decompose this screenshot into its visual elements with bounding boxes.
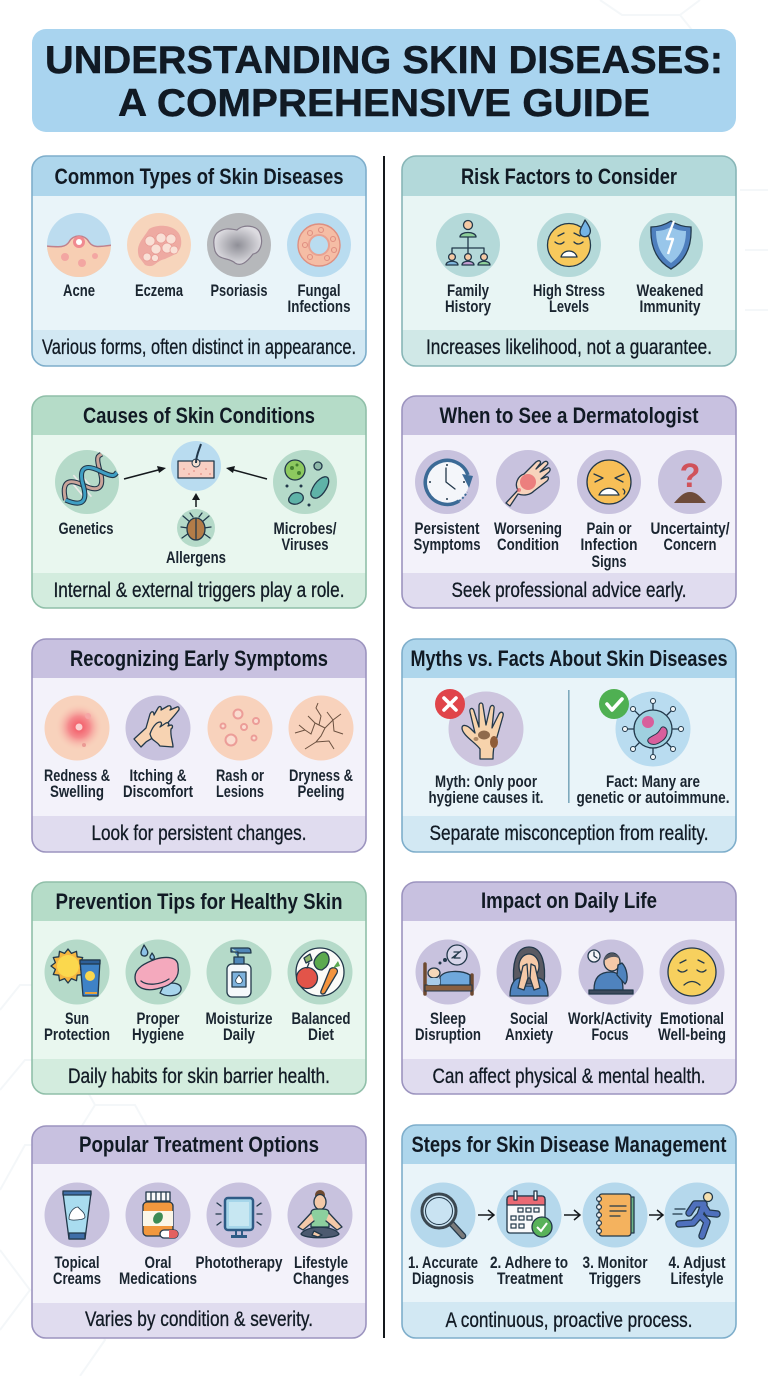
- panel: myths vs. facts: [402, 639, 736, 852]
- icon: oral medications: [126, 1182, 190, 1248]
- icon: topical creams tube: [44, 1182, 110, 1248]
- labels: genetic or autoimmune.: [576, 789, 730, 807]
- heading: Causes of Skin Conditions: [83, 403, 315, 428]
- labels: Rash or: [216, 767, 264, 785]
- labels: Persistent: [414, 520, 480, 538]
- labels: Topical: [54, 1254, 100, 1272]
- labels: Levels: [549, 298, 589, 316]
- labels: 3. Monitor: [582, 1254, 648, 1272]
- labels: Creams: [53, 1270, 101, 1288]
- labels: 4. Adjust: [668, 1254, 726, 1272]
- heading: Common Types of Skin Diseases: [54, 164, 344, 189]
- labels: Social: [510, 1010, 548, 1028]
- divider between myth and fact: [568, 690, 570, 803]
- labels: Diet: [308, 1026, 334, 1044]
- labels: Anxiety: [505, 1026, 554, 1044]
- labels: Genetics: [58, 520, 114, 538]
- labels: Medications: [119, 1270, 197, 1288]
- icon: uncertainty question mound: ?: [680, 457, 700, 495]
- heading: Risk Factors to Consider: [461, 164, 677, 189]
- labels: Triggers: [589, 1270, 641, 1288]
- labels: History: [445, 298, 492, 316]
- icon: worsening condition hand: [496, 450, 560, 514]
- icon: moisturize bottle: [206, 940, 272, 1004]
- panel: steps for skin disease management: [402, 1125, 736, 1338]
- labels: Dryness &: [289, 767, 353, 785]
- icon: persistent symptoms clock: [415, 450, 479, 514]
- labels: [44, 767, 353, 801]
- labels: [415, 1010, 726, 1044]
- labels: [44, 1010, 350, 1044]
- labels: Psoriasis: [210, 282, 268, 300]
- icon: lifestyle meditation: [288, 1182, 352, 1248]
- icon: rash or lesions: [208, 696, 272, 760]
- footer note: A continuous, proactive process.: [446, 1309, 692, 1332]
- footer note: Daily habits for skin barrier health.: [68, 1065, 330, 1088]
- icon: microbes and viruses: [273, 450, 337, 514]
- labels: Concern: [664, 536, 716, 554]
- labels: [408, 1254, 726, 1288]
- icon: adjust lifestyle runner: [664, 1182, 730, 1248]
- icon: pain face: [577, 450, 641, 514]
- panel: causes of skin conditions: [32, 396, 366, 608]
- footer note: Look for persistent changes.: [92, 822, 306, 845]
- labels: Infections: [288, 298, 350, 316]
- icon: fact microbe: [616, 692, 690, 766]
- arrow: step 1 to 2: [478, 1210, 494, 1220]
- labels: Discomfort: [123, 783, 193, 801]
- labels: [445, 282, 704, 316]
- heading: Prevention Tips for Healthy Skin: [56, 889, 342, 914]
- labels: [414, 520, 730, 571]
- icon: eczema: [127, 213, 191, 277]
- footer note: Various forms, often distinct in appearance.: [42, 336, 356, 359]
- labels: Daily: [223, 1026, 256, 1044]
- labels: Treatment: [497, 1270, 563, 1288]
- labels: Infection: [580, 536, 638, 554]
- title banner: A COMPREHENSIVE GUIDE: [118, 82, 650, 125]
- labels: Redness &: [44, 767, 110, 785]
- arrow: allergens to skin: [192, 493, 200, 507]
- labels: Fungal: [298, 282, 340, 300]
- labels: [63, 282, 350, 316]
- footer note: Internal & external triggers play a role.: [54, 579, 344, 602]
- labels: Family: [447, 282, 490, 300]
- labels: Myth: Only poor: [435, 773, 537, 791]
- icon: adhere to treatment calendar: [496, 1182, 562, 1248]
- labels: Balanced: [292, 1010, 350, 1028]
- labels: Lesions: [216, 783, 264, 801]
- labels: Acne: [63, 282, 95, 300]
- heading: When to See a Dermatologist: [440, 403, 699, 428]
- labels: [53, 1254, 349, 1288]
- heading: Recognizing Early Symptoms: [70, 646, 328, 671]
- panel: recognizing early symptoms: [32, 639, 366, 852]
- badge: myth cross: [435, 689, 465, 719]
- icon: accurate diagnosis magnifier: [410, 1182, 476, 1248]
- icon: skin layer center: [171, 441, 221, 491]
- labels: Condition: [497, 536, 559, 554]
- labels: Lifestyle: [294, 1254, 348, 1272]
- labels: Allergens: [166, 549, 226, 567]
- labels: Phototherapy: [196, 1254, 283, 1272]
- labels: Disruption: [415, 1026, 481, 1044]
- icon: sun protection: [44, 940, 110, 1004]
- labels: Work/Activity: [568, 1010, 653, 1028]
- labels: Viruses: [282, 536, 328, 554]
- labels: Eczema: [135, 282, 184, 300]
- arrow: genetics to skin: [124, 466, 166, 479]
- icon: phototherapy lamp: [206, 1182, 272, 1248]
- labels: [58, 520, 337, 567]
- icon: acne: [45, 213, 113, 279]
- heading: Impact on Daily Life: [481, 888, 657, 913]
- icon: dryness and peeling: [288, 696, 354, 760]
- labels: Focus: [592, 1026, 628, 1044]
- labels: Protection: [44, 1026, 110, 1044]
- labels: Changes: [293, 1270, 349, 1288]
- footer note: Can affect physical & mental health.: [432, 1065, 706, 1088]
- icon: redness and swelling: [44, 696, 110, 760]
- panel: popular treatment options: [32, 1126, 366, 1338]
- title banner: [32, 29, 736, 132]
- icon: social anxiety: [496, 940, 562, 1004]
- labels: Moisturize: [206, 1010, 272, 1028]
- footer note: Seek professional advice early.: [452, 579, 686, 602]
- panel: when to see a dermatologist: [402, 396, 736, 608]
- labels: Well-being: [658, 1026, 726, 1044]
- labels: Uncertainty/: [650, 520, 730, 538]
- labels: Lifestyle: [670, 1270, 724, 1288]
- labels: Peeling: [298, 783, 344, 801]
- labels: Pain or: [586, 520, 632, 538]
- title banner: UNDERSTANDING SKIN DISEASES:: [45, 39, 723, 82]
- badge: fact check: [599, 689, 629, 719]
- icon: balanced diet plate: [288, 940, 352, 1004]
- panel: risk factors to consider: [402, 156, 736, 366]
- labels: Sleep: [430, 1010, 466, 1028]
- icon: high stress face: [537, 213, 601, 277]
- labels: Proper: [136, 1010, 180, 1028]
- labels: Itching &: [130, 767, 187, 785]
- labels: Oral: [144, 1254, 172, 1272]
- panel: common types of skin diseases: [32, 156, 366, 366]
- labels: Worsening: [494, 520, 562, 538]
- labels: hygiene causes it.: [428, 789, 544, 807]
- labels: Emotional: [660, 1010, 724, 1028]
- icon: proper hygiene soap: [126, 940, 190, 1004]
- labels: Immunity: [640, 298, 701, 316]
- labels: Diagnosis: [412, 1270, 474, 1288]
- labels: Fact: Many are: [606, 773, 700, 791]
- footer note: Varies by condition & severity.: [85, 1308, 313, 1331]
- labels: Hygiene: [132, 1026, 184, 1044]
- labels: Symptoms: [414, 536, 480, 554]
- icon: weakened immunity shield: [639, 213, 703, 277]
- icon: itching hands: [126, 696, 190, 760]
- icon: family history: [436, 213, 500, 277]
- center divider line: [383, 156, 385, 1338]
- icon: genetics dna: [55, 450, 119, 514]
- panel: impact on daily life: [402, 882, 736, 1094]
- labels: High Stress: [533, 282, 605, 300]
- icon: myth hand: [448, 692, 524, 766]
- icon: monitor triggers notebook: [582, 1182, 648, 1248]
- footer note: Separate misconception from reality.: [430, 822, 708, 845]
- arrow: step 2 to 3: [564, 1210, 580, 1220]
- icon: fungal infections: [287, 213, 351, 277]
- icon: work activity focus: [578, 940, 644, 1004]
- icon: emotional well-being: [660, 940, 724, 1004]
- icon: uncertainty question mound: [658, 450, 722, 514]
- icon: psoriasis: [207, 213, 271, 277]
- labels: Microbes/: [274, 520, 337, 538]
- labels: Swelling: [50, 783, 104, 801]
- labels: 1. Accurate: [408, 1254, 478, 1272]
- panel: prevention tips: [32, 882, 366, 1094]
- icon: sleep disruption: [416, 940, 480, 1004]
- heading: Popular Treatment Options: [79, 1132, 319, 1157]
- arrow: microbes to skin: [226, 466, 267, 479]
- labels: [428, 773, 730, 807]
- labels: Sun: [65, 1010, 89, 1028]
- labels: 2. Adhere to: [490, 1254, 568, 1272]
- labels: Weakened: [636, 282, 704, 300]
- arrow: step 3 to 4: [649, 1210, 663, 1220]
- labels: Signs: [592, 553, 626, 571]
- icon: allergens dust mite: [177, 509, 215, 547]
- footer note: Increases likelihood, not a guarantee.: [426, 336, 712, 359]
